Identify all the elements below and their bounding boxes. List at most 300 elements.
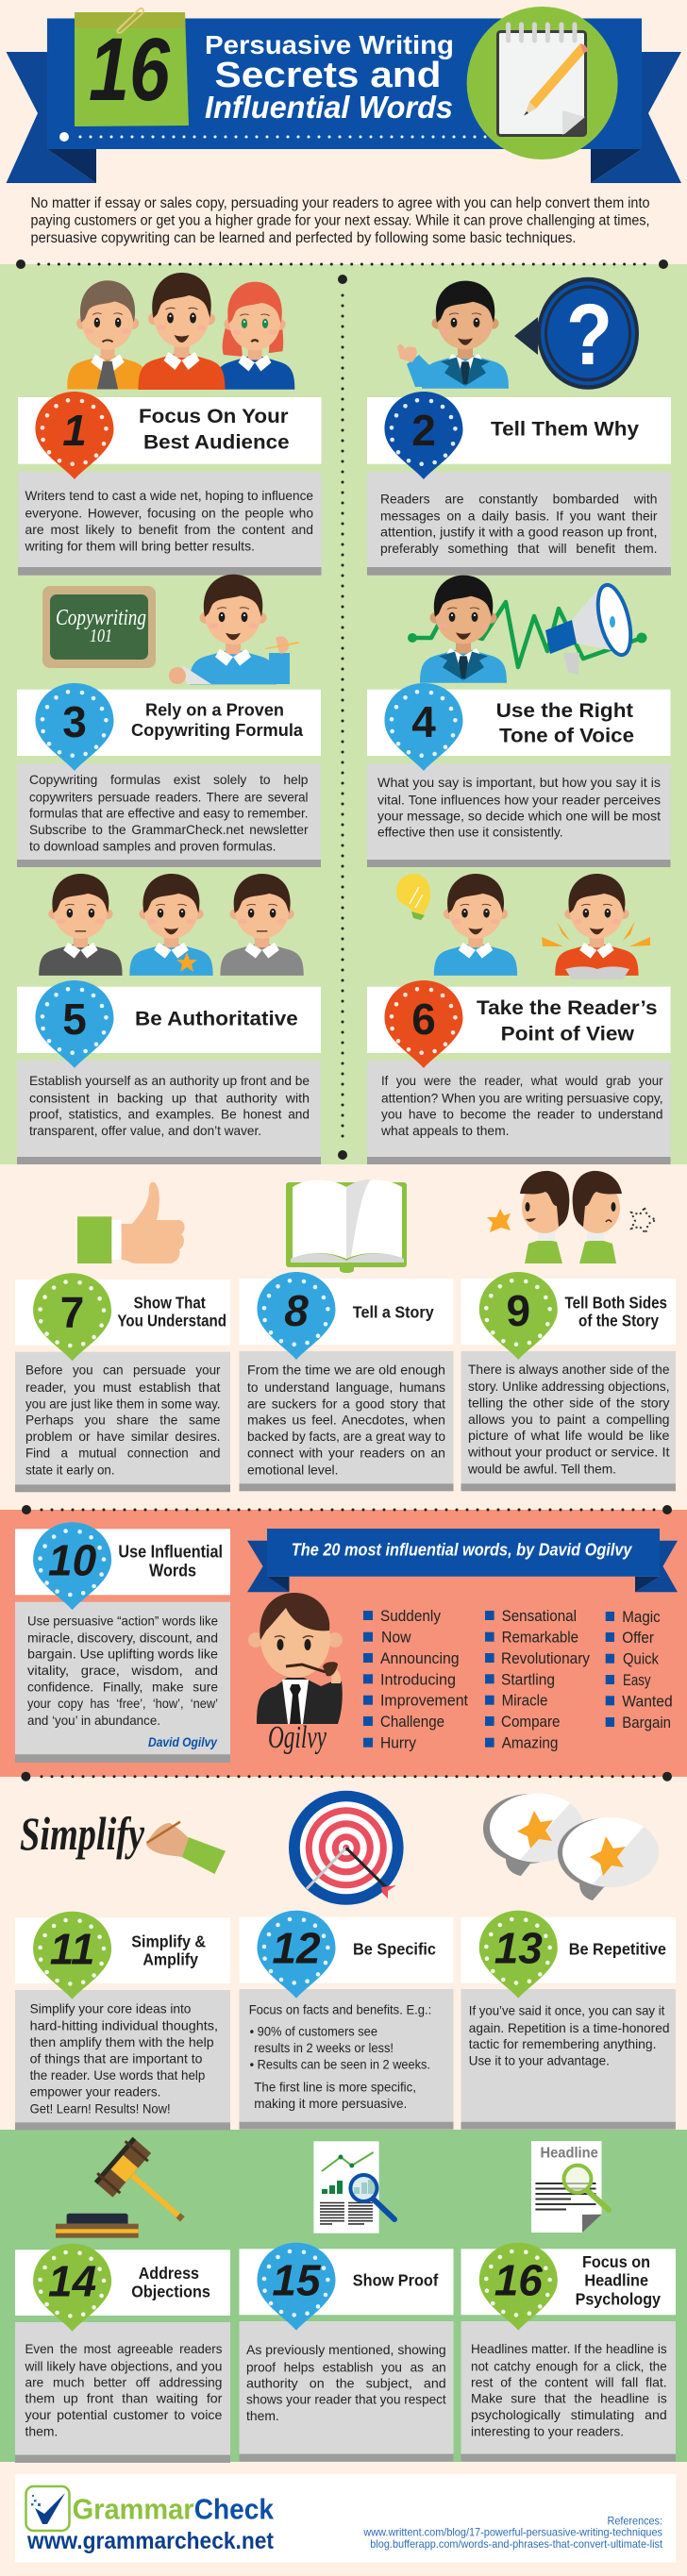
list: influential words column 3: Quick: [623, 1651, 660, 1668]
logo mark: [26, 2486, 70, 2531]
body text: are much better off addressing: [25, 2374, 222, 2389]
number pin 15: 15: [272, 2256, 322, 2305]
list: influential words column 1: Announcing: [380, 1650, 460, 1667]
body text: copywriters persuade readers. There are several: [29, 789, 308, 804]
body text: will likely have objections, and you: [25, 2358, 222, 2373]
body text: rest of the content will fall flat.: [471, 2374, 667, 2389]
card 13: be repetitive: [461, 1911, 676, 2130]
number pin 14: 14: [48, 2257, 96, 2306]
number pin 9: 9: [507, 1286, 530, 1335]
title box: [17, 987, 321, 1053]
body text: Simplify your core ideas into: [30, 2000, 192, 2016]
card 7: show that you understand: [15, 1273, 230, 1492]
left head: [520, 1171, 569, 1263]
body text: [24, 488, 313, 553]
references: blog.bufferapp.com/words-and-phrases-that-convert-ultimate-list: [370, 2537, 663, 2551]
heading: Use the Right: [496, 700, 633, 722]
list: influential words column 2: Amazing: [502, 1735, 559, 1752]
body text: [27, 1613, 218, 1728]
title box: [240, 1279, 453, 1345]
banner: the 20 most influential words: The 20 most influential words, by David Ogilvy: [292, 1540, 632, 1559]
icon: target and arrow: [289, 1791, 404, 1905]
illustration: three authority figures: [39, 874, 304, 976]
heading: Simplify &: [131, 1932, 206, 1950]
heading: Address: [139, 2264, 199, 2283]
body text: Subscribe to the GrammarCheck.net newsletter: [29, 822, 309, 837]
body text: If you were the reader, what would grab your: [381, 1073, 663, 1088]
body panel: [461, 1351, 676, 1491]
title box: [461, 2249, 676, 2315]
body text: Get! Learn! Results! Now!: [30, 2100, 171, 2116]
illustration: three audience members: [67, 273, 294, 390]
number pin 8: [257, 1272, 336, 1360]
card 4: use the right tone of voice: [367, 683, 670, 867]
body panel: [17, 1061, 321, 1164]
title box: [15, 1529, 230, 1595]
body text: As previously mentioned, showing: [246, 2342, 446, 2357]
number pin 10: 10: [48, 1535, 97, 1584]
main title: Influential Words: [205, 90, 453, 125]
dotted star: [631, 1208, 656, 1233]
body text: Writers tend to cast a wide net, hoping to influence: [25, 488, 313, 503]
body text: [29, 1073, 310, 1138]
body panel: [15, 2322, 230, 2463]
heading: [139, 406, 289, 454]
list: influential words column 1: Hurry: [380, 1735, 417, 1752]
body text: preferably something that will benefit them.: [380, 541, 657, 556]
list: influential words column 3: Magic: [622, 1609, 661, 1626]
illustration: man with question bubble: [397, 277, 639, 390]
heading: Show Proof: [353, 2270, 438, 2289]
body text: backed by facts, are a great way to: [247, 1429, 445, 1444]
title box: [15, 1280, 230, 1346]
icon: two sides heads: [487, 1171, 656, 1263]
number pin 11: 11: [50, 1925, 94, 1974]
chalkboard: [42, 586, 156, 668]
list: influential words column 2: Remarkable: [502, 1630, 578, 1647]
number pin 10: [33, 1522, 111, 1610]
illustration: man with megaphone and sound wave: [408, 576, 647, 683]
heading: [496, 700, 634, 747]
body text: Use persuasive “action” words like: [27, 1613, 218, 1628]
card 1: focus on your best audience: [18, 392, 321, 576]
body text: proof, statistics, and examples. Be honest and: [29, 1107, 310, 1122]
list: influential words column 2: Miracle: [502, 1693, 547, 1710]
body text: Headlines matter. If the headline is: [471, 2341, 667, 2356]
body text: [246, 2342, 446, 2423]
section background: tips 1-6: [0, 264, 687, 1164]
body text: [249, 2001, 431, 2111]
number pin 15: [257, 2243, 336, 2331]
orange star: [487, 1209, 511, 1232]
heading: Point of View: [501, 1023, 635, 1045]
body text: [380, 1073, 663, 1138]
heading: You Understand: [117, 1312, 226, 1330]
body text: story. Unlike addressing objections,: [468, 1379, 670, 1394]
number pin 3: 3: [62, 697, 87, 746]
number pin 2: [385, 392, 462, 479]
title box: [15, 2250, 230, 2316]
body text: allows you to paint a compelling: [468, 1412, 670, 1427]
number pin 13: 13: [494, 1924, 543, 1973]
illustration: man with question bubble: ?: [566, 287, 612, 383]
body text: results in 2 weeks or less!: [254, 2040, 394, 2055]
heading: Use Influential: [118, 1542, 223, 1562]
heading: Show That: [134, 1294, 206, 1313]
title box: [367, 690, 670, 756]
body text: • 90% of customers see: [250, 2023, 377, 2038]
list: influential words column 3: Offer: [622, 1630, 654, 1647]
list: influential words column 2: Compare: [501, 1714, 561, 1731]
body text: your message, so decide which one will be most: [377, 808, 661, 823]
body text: shows your reader that you respect: [246, 2392, 446, 2407]
title box: [461, 1917, 676, 1983]
body text: [471, 2341, 667, 2439]
title box: [461, 1279, 676, 1345]
title banner: [6, 7, 681, 183]
body text: [25, 2341, 223, 2439]
GrammarCheck logo: www.grammarcheck.net: [26, 2528, 275, 2554]
card 16: focus on headline psychology: [461, 2243, 676, 2462]
bubble 2: [558, 1817, 659, 1900]
icon: headline document with magnifier: [531, 2141, 609, 2233]
body text: [29, 772, 309, 853]
heading: Tell a Story: [353, 1303, 434, 1322]
body text: them.: [246, 2408, 279, 2423]
number pin 1: [36, 392, 113, 479]
body text: [247, 1363, 445, 1477]
main title: Secrets and: [215, 56, 442, 95]
ribbon tails: [6, 52, 681, 183]
number pin 12: 12: [272, 1924, 321, 1973]
body text: vitality, grace, wisdom, and: [27, 1663, 218, 1678]
body text: everyone. However, focusing on the people who: [25, 506, 313, 521]
list: influential words column 2: Startling: [501, 1671, 555, 1688]
body text: psychologically stimulating and: [471, 2407, 667, 2422]
references: References:: [608, 2515, 662, 2528]
section background: tips 14-16: [0, 2130, 687, 2462]
card 6: take the reader's point of view: [367, 980, 670, 1164]
heading: of the Story: [578, 1312, 659, 1330]
heading: Words: [149, 1561, 196, 1581]
number pin 5: [36, 980, 113, 1068]
body text: From the time we are old enough: [247, 1363, 445, 1378]
card 15: show proof: [240, 2243, 453, 2462]
number pin 13: [479, 1911, 558, 1999]
body panel: [15, 1352, 230, 1492]
references: www.writtent.com/blog/17-powerful-persuasive-writing-techniques: [362, 2525, 662, 2538]
body text: connect with your readers on an: [247, 1445, 445, 1460]
ribbon body: [47, 19, 642, 149]
body text: If you’ve said it once, you can say it: [469, 2003, 664, 2018]
number pin 11: [33, 1912, 111, 1999]
GrammarCheck logo: Check: [194, 2492, 275, 2525]
intro paragraph: paying customers or get you a higher grade for your next essay. While it can prove challenging at times,: [30, 213, 649, 228]
body text: [380, 491, 658, 556]
card 9: tell both sides of the story: [461, 1272, 676, 1491]
body text: authority on the subject, and: [246, 2375, 446, 2390]
number pin 4: [385, 683, 462, 771]
title box: [367, 987, 670, 1053]
body text: Focus on facts and benefits. E.g.:: [249, 2001, 431, 2016]
card 3: rely on a proven copywriting formula: [17, 683, 321, 867]
heading: Be Authoritative: [135, 1009, 298, 1030]
heading: [564, 1294, 667, 1330]
heading: Tell Both Sides: [564, 1294, 667, 1313]
chalkboard: 101: [90, 626, 112, 646]
illustration: idea man and surprised reader: [396, 874, 650, 979]
number pin 7: 7: [60, 1287, 84, 1336]
banner: the 20 most influential words: [247, 1529, 678, 1592]
heading: [576, 2252, 661, 2308]
heading: Focus on: [582, 2252, 650, 2271]
body text: your potential customer to voice: [25, 2407, 223, 2422]
list: influential words column 3: [606, 1609, 673, 1731]
body text: problem or have similar desires.: [25, 1429, 221, 1444]
heading: Take the Reader’s: [477, 997, 657, 1019]
title box: [367, 397, 671, 464]
body text: Find a mutual connection and: [25, 1445, 221, 1460]
list: influential words column 1: Suddenly: [380, 1608, 442, 1625]
body text: the reader. Use words that help: [30, 2067, 205, 2083]
body text: not catchy enough for a click, the: [471, 2358, 667, 2373]
illustration: David Ogilvy with pipe and signature: [248, 1593, 343, 1755]
heading: Be Specific: [353, 1939, 436, 1958]
body text: messages on a daily basis. If you want their: [380, 509, 658, 524]
icon: repeated speech bubbles with stars: [483, 1793, 659, 1900]
heading: [117, 1294, 226, 1330]
body text: The first line is more specific,: [254, 2080, 416, 2095]
body text: Make sure that the headline is: [471, 2391, 667, 2406]
megaphone: [545, 581, 637, 675]
card 12: be specific: [240, 1911, 453, 2130]
body text: would be awful. Tell them.: [467, 1462, 616, 1477]
heading: Objections: [131, 2282, 210, 2300]
body text: Readers are constantly bombarded with: [380, 491, 657, 506]
GrammarCheck logo: Grammar: [73, 2492, 194, 2525]
number pin 1: 1: [62, 406, 87, 455]
heading: Tell Them Why: [491, 419, 639, 441]
number pin 7: [33, 1273, 111, 1361]
list: influential words column 1: Introducing: [380, 1671, 456, 1688]
body text: picture of what life would be like: [468, 1428, 670, 1443]
list: influential words column 3: Easy: [623, 1672, 651, 1689]
body text: Establish yourself as an authority up front and be: [29, 1073, 310, 1088]
references: [362, 2515, 663, 2551]
heading: [131, 699, 304, 740]
body panel: [15, 1602, 230, 1763]
attribution: David Ogilvy: [148, 1734, 218, 1749]
body text: you are just like them in some way.: [25, 1396, 221, 1411]
bubble 1: [483, 1793, 584, 1876]
number pin 14: [33, 2244, 111, 2332]
body text: effective then use it consistently.: [377, 825, 563, 840]
body text: [25, 1363, 221, 1477]
list: influential words column 3: Bargain: [622, 1715, 671, 1731]
body text: There is always another side of the: [468, 1362, 670, 1377]
list: influential words column 3: Wanted: [622, 1693, 673, 1710]
body text: Even the most agreeable readers: [25, 2341, 222, 2356]
body text: of things that are important to: [30, 2051, 203, 2066]
body text: what appeals to them.: [380, 1123, 510, 1138]
number pin 4: 4: [411, 697, 436, 746]
body text: making it more persuasive.: [254, 2096, 407, 2111]
body text: are most likely to benefit from the content and: [25, 522, 313, 537]
body panel: [240, 1989, 453, 2130]
body text: proof helps establish you as an: [246, 2359, 446, 2374]
heading: [131, 2264, 210, 2300]
heading: Tone of Voice: [499, 726, 634, 747]
body text: transparent, offer value, and don’t waver.: [29, 1123, 261, 1138]
list: influential words column 2: [485, 1608, 591, 1752]
card 11: simplify and amplify: [15, 1912, 230, 2130]
number pin 8: 8: [284, 1286, 309, 1335]
heading: Psychology: [576, 2289, 661, 2308]
body text: [469, 2003, 670, 2067]
body text: empower your readers.: [30, 2083, 160, 2099]
list: influential words column 2: Sensational: [502, 1608, 577, 1625]
body text: and ‘you’ in abundance.: [27, 1713, 160, 1728]
body text: to download samples and proven formulas.: [29, 838, 276, 853]
dotted rule on ribbon: [59, 132, 491, 142]
heading: [477, 997, 657, 1045]
title box: [17, 690, 321, 756]
green note with number 16: 16: [89, 20, 171, 120]
number pin 9: [479, 1272, 558, 1360]
heading: [131, 1932, 206, 1969]
number pin 16: [479, 2243, 558, 2331]
body text: again. Repetition is a time-honored: [469, 2020, 670, 2035]
section background: tip 10: [0, 1510, 687, 1777]
body text: What you say is important, but how you say it is: [377, 775, 661, 790]
icon: notepad and pencil: [467, 7, 618, 159]
list: influential words column 1: [363, 1608, 468, 1752]
number pin 6: [385, 980, 462, 1068]
body text: without your product or service. It: [467, 1444, 670, 1459]
card 8: tell a story: [240, 1272, 453, 1491]
man with pencil: [169, 575, 298, 684]
intro paragraph: persuasive copywriting can be learned and perfected by following some basic techniques.: [30, 230, 576, 246]
sound wave: [408, 602, 647, 667]
main title: Persuasive Writing: [205, 30, 454, 59]
main title: [205, 30, 454, 125]
body text: them up front than waiting for: [25, 2391, 223, 2406]
icon: thumbs up: [77, 1182, 185, 1263]
number pin 2: 2: [411, 406, 436, 455]
open book: [565, 966, 629, 979]
heading: Headline: [584, 2271, 648, 2290]
body text: them.: [25, 2424, 58, 2439]
heading: [118, 1542, 223, 1581]
body text: writing for them will bring better results.: [24, 538, 255, 553]
body text: consistent in backing up that authority with: [29, 1090, 310, 1105]
icon: simplify handwriting: [20, 1807, 226, 1874]
card 14: address objections: [15, 2244, 230, 2463]
body text: formulas that are effective and easy to remember.: [29, 806, 308, 821]
heading: Rely on a Proven: [145, 699, 284, 719]
rays: [542, 921, 650, 946]
light bulb: [396, 874, 430, 920]
card 10: use influential words: [15, 1522, 230, 1763]
body panel: [240, 1351, 453, 1491]
intro paragraph: No matter if essay or sales copy, persuading your readers to agree with you can help convert them into: [30, 195, 649, 211]
list: influential words column 2: Revolutionary: [501, 1650, 591, 1667]
body text: state it early on.: [25, 1462, 115, 1477]
body panel: [15, 1990, 230, 2130]
icon: headline document with magnifier: Headline: [540, 2146, 598, 2162]
body panel: [18, 472, 321, 576]
number pin 16: 16: [494, 2256, 543, 2305]
body text: Copywriting formulas exist solely to help: [29, 772, 309, 787]
number pin 6: 6: [411, 995, 436, 1044]
heading: Amplify: [142, 1950, 198, 1969]
icon: simplify handwriting: Simplify: [20, 1807, 145, 1860]
body panel: [367, 1061, 670, 1164]
body text: reader, you must establish that: [25, 1380, 221, 1395]
card 2: tell them why: [367, 392, 671, 576]
body text: vital. Tone influences how your reader perceives: [377, 792, 661, 807]
heading: Best Audience: [143, 432, 289, 454]
body text: confidence. Finally, make sure: [27, 1679, 218, 1694]
heading: Copywriting Formula: [131, 720, 304, 740]
body text: interesting to your readers.: [471, 2424, 624, 2439]
body text: [30, 2000, 218, 2116]
title box: [18, 397, 321, 464]
illustration: copywriting 101 chalkboard and man: [42, 575, 298, 684]
heading: Be Repetitive: [569, 1939, 666, 1958]
signature: Ogilvy: [268, 1720, 327, 1755]
body text: you have to become the reader to understand: [381, 1107, 662, 1122]
body text: miracle, discovery, discount, and: [27, 1631, 218, 1646]
GrammarCheck logo: [26, 2486, 275, 2554]
body panel: [240, 2321, 453, 2462]
body text: telling the other side of the story: [468, 1396, 670, 1411]
body text: [377, 775, 661, 840]
body text: bargain. Use uplifting words like: [27, 1647, 218, 1662]
body text: hard-hitting individual thoughts,: [30, 2018, 218, 2033]
title box: [240, 2249, 453, 2315]
icon: proof document with magnifier: [313, 2141, 394, 2233]
list: influential words column 1: Improvement: [380, 1693, 468, 1710]
body text: Before you can persuade your: [25, 1363, 221, 1378]
icon: gavel: [56, 2135, 202, 2241]
number pin 12: [257, 1911, 336, 1999]
body text: makes us feel. Anecdotes, when: [247, 1413, 445, 1428]
body text: to understand language, humans: [247, 1380, 445, 1395]
body panel: [367, 472, 671, 576]
body text: then amplify them with the help: [30, 2034, 214, 2049]
chalkboard: Copywriting: [56, 606, 146, 630]
body panel: [367, 763, 670, 867]
heading: Focus On Your: [139, 406, 289, 427]
list: influential words column 1: Challenge: [380, 1714, 444, 1731]
body text: are suckers for a good story that: [247, 1396, 445, 1411]
title box: [15, 1917, 230, 1983]
body text: attention, justify it with a good reason up front,: [380, 525, 657, 540]
number pin 3: [36, 683, 113, 771]
number pin 5: 5: [62, 995, 87, 1044]
body text: tactic for remembering anything.: [469, 2036, 657, 2051]
body text: Use it to your advantage.: [469, 2052, 610, 2067]
right head: [573, 1171, 622, 1263]
body text: Perhaps you share the same: [25, 1413, 221, 1428]
body text: your copy has ‘free’, ‘how’, ‘new’: [27, 1696, 218, 1711]
title box: [240, 1917, 453, 1983]
body panel: [17, 763, 321, 867]
body text: emotional level.: [247, 1462, 338, 1477]
body panel: [461, 2321, 676, 2462]
list: influential words column 1: Now: [381, 1630, 411, 1647]
